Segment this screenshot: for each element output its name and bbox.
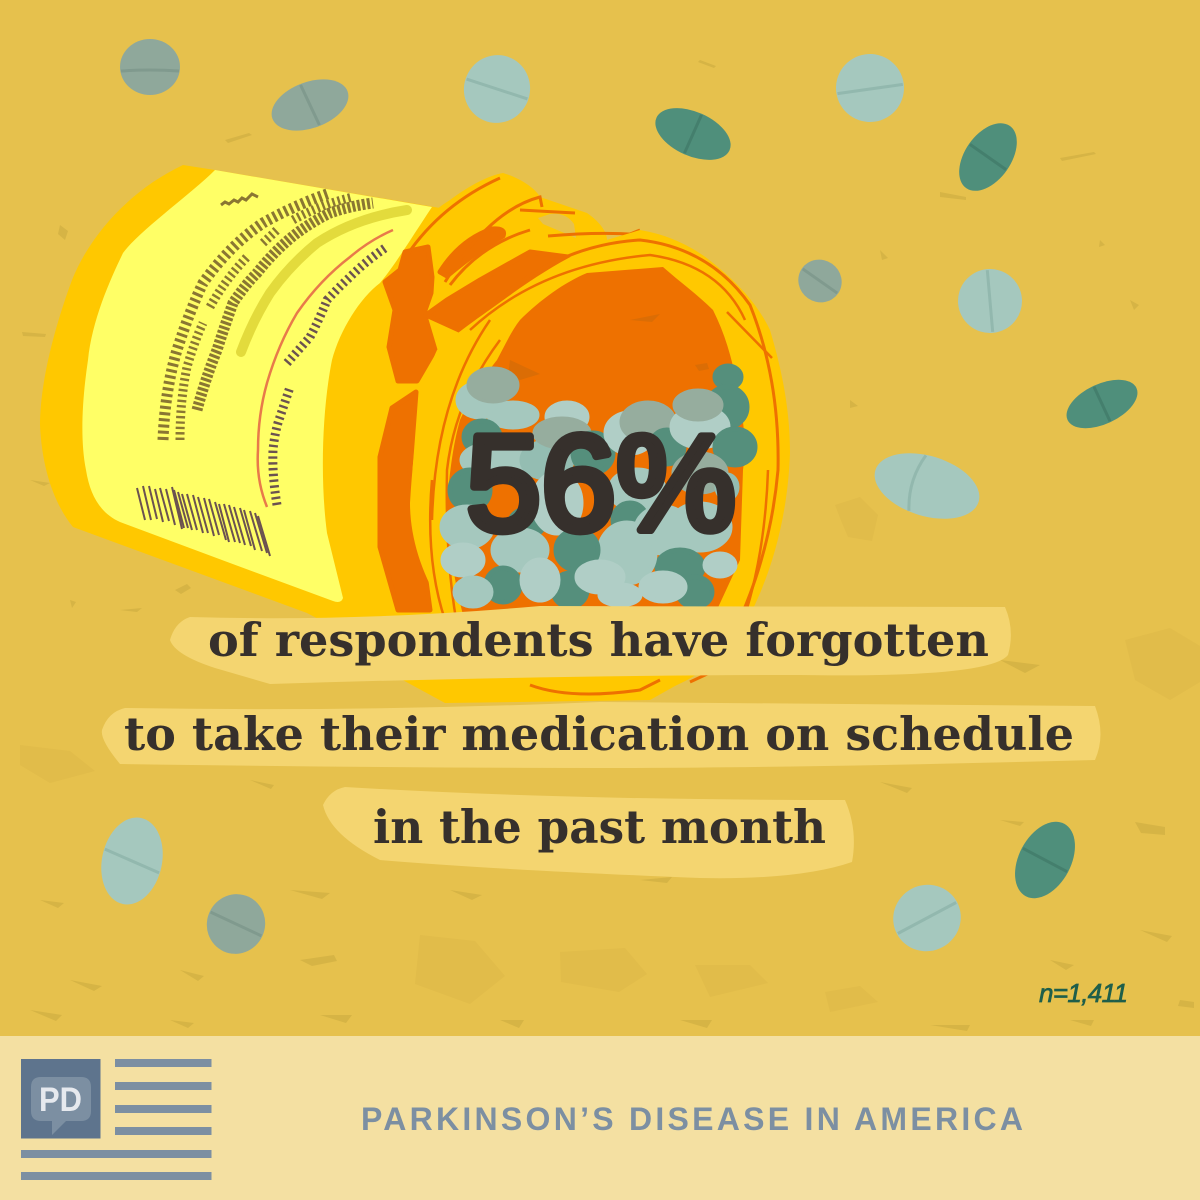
sample size note: n=1,411 bbox=[1039, 978, 1128, 1008]
teal pill 12 bbox=[553, 573, 587, 607]
light pill 2 bbox=[489, 403, 537, 427]
rim line outer bbox=[497, 240, 778, 640]
highlight band line 2 bbox=[102, 702, 1101, 768]
pill bottle bbox=[40, 165, 790, 703]
label scribble text block 2 bbox=[180, 197, 353, 440]
label red line bbox=[258, 230, 393, 507]
logo square bbox=[21, 1059, 100, 1138]
footer title: PARKINSON’S DISEASE IN AMERICA bbox=[361, 1101, 1023, 1137]
label scribble text block 3 bbox=[197, 203, 373, 410]
pill 12 bbox=[197, 885, 275, 963]
body inner strip bbox=[380, 392, 430, 610]
prescription label bbox=[82, 170, 432, 602]
bottle mouth rim bbox=[410, 230, 790, 700]
pill 5 bbox=[648, 98, 738, 170]
grey pill 5 bbox=[673, 453, 727, 493]
light pill 4 bbox=[462, 443, 532, 477]
pill 6 bbox=[947, 113, 1029, 201]
label highlight stroke bbox=[241, 210, 407, 352]
teal pill 5 bbox=[650, 430, 684, 464]
light pill 17 bbox=[705, 554, 735, 576]
light pill 12 bbox=[670, 504, 730, 550]
teal pill 13 bbox=[556, 530, 598, 570]
pill 9 bbox=[1059, 370, 1145, 438]
teal pill 9 bbox=[613, 503, 647, 537]
light pill 1 bbox=[458, 383, 502, 417]
light pill 19 bbox=[577, 562, 623, 592]
light pill 6 bbox=[606, 413, 654, 453]
text line 1: of respondents have forgotten bbox=[208, 613, 989, 667]
light pill 20 bbox=[455, 578, 491, 606]
pill 3 bbox=[455, 46, 539, 132]
under-rim shadow bbox=[426, 252, 568, 335]
interior texture bbox=[508, 314, 709, 380]
pill 10 bbox=[867, 442, 987, 530]
teal pill 11 bbox=[486, 568, 520, 602]
scattered pills bbox=[94, 39, 1145, 963]
pill 2 bbox=[265, 70, 355, 140]
thread lines bbox=[405, 178, 665, 285]
label scribble text block bbox=[163, 193, 330, 440]
teal pill 7 bbox=[450, 470, 490, 510]
teal pill 14 bbox=[678, 577, 712, 607]
grey pill 4 bbox=[674, 390, 722, 420]
pill 7 bbox=[790, 251, 850, 311]
background soft mottled patches bbox=[20, 497, 1200, 1012]
highlight band line 3 bbox=[323, 787, 854, 878]
teal pill 8 bbox=[510, 509, 544, 537]
text line 2: to take their medication on schedule bbox=[124, 707, 1074, 761]
barcode bbox=[137, 486, 270, 556]
light pill 3 bbox=[547, 403, 587, 431]
label purple handwriting bbox=[273, 248, 385, 505]
statistic 56%: 56% bbox=[466, 407, 736, 559]
neck orange shading bbox=[380, 229, 568, 610]
logo bbox=[21, 1059, 212, 1180]
light pill 21 bbox=[641, 573, 685, 601]
light pill 5 bbox=[522, 442, 572, 478]
light pill 15 bbox=[599, 523, 655, 583]
neck blob bbox=[385, 247, 435, 381]
pill 4 bbox=[832, 50, 908, 126]
teal pill 2 bbox=[573, 433, 613, 473]
neck gap bbox=[538, 214, 576, 238]
pill 14 bbox=[881, 873, 973, 963]
background speckle texture bbox=[22, 60, 1194, 1031]
teal pill 3 bbox=[715, 366, 741, 388]
pills inside bottle bbox=[442, 366, 755, 607]
grey pill 1 bbox=[468, 368, 518, 402]
label scribble line 1 bbox=[221, 194, 258, 205]
label paper bbox=[82, 170, 432, 602]
highlight band line 1 bbox=[170, 606, 1011, 684]
text line 3: in the past month bbox=[373, 800, 826, 854]
teal pill 6 bbox=[715, 429, 755, 465]
light pill 16 bbox=[443, 545, 483, 575]
teal pill 4 bbox=[707, 387, 747, 427]
lower rim extension bbox=[388, 672, 700, 703]
light pill 9 bbox=[610, 470, 664, 510]
light pill 8 bbox=[717, 475, 737, 499]
teal pill 1 bbox=[464, 421, 500, 453]
speech bubble bbox=[31, 1077, 91, 1135]
pill 1 bbox=[120, 39, 180, 95]
light pill 18 bbox=[522, 560, 558, 600]
neck thread shadow bbox=[440, 229, 504, 276]
light pill 22 bbox=[600, 585, 640, 605]
light pill 7 bbox=[672, 407, 728, 447]
pill 11 bbox=[94, 812, 170, 910]
flag stripes bbox=[21, 1059, 212, 1180]
pill 8 bbox=[955, 266, 1025, 336]
light pill 11 bbox=[533, 473, 581, 533]
grey pill 2 bbox=[534, 418, 590, 448]
bottom rim orange bbox=[530, 668, 720, 694]
footer bar bbox=[0, 1036, 1200, 1200]
body text bbox=[124, 613, 1074, 854]
light pill 10 bbox=[442, 507, 492, 547]
rim line inner bbox=[430, 255, 772, 640]
grey pill 3 bbox=[621, 402, 675, 442]
logo PD letters: PD bbox=[39, 1081, 82, 1119]
bottle neck flange bbox=[395, 173, 720, 380]
teal pill 10 bbox=[657, 550, 703, 584]
bottle interior bbox=[447, 267, 745, 640]
pill 13 bbox=[1003, 812, 1087, 908]
light pill 14 bbox=[493, 530, 547, 570]
light pill 13 bbox=[636, 507, 690, 553]
bottle body bbox=[40, 165, 480, 662]
